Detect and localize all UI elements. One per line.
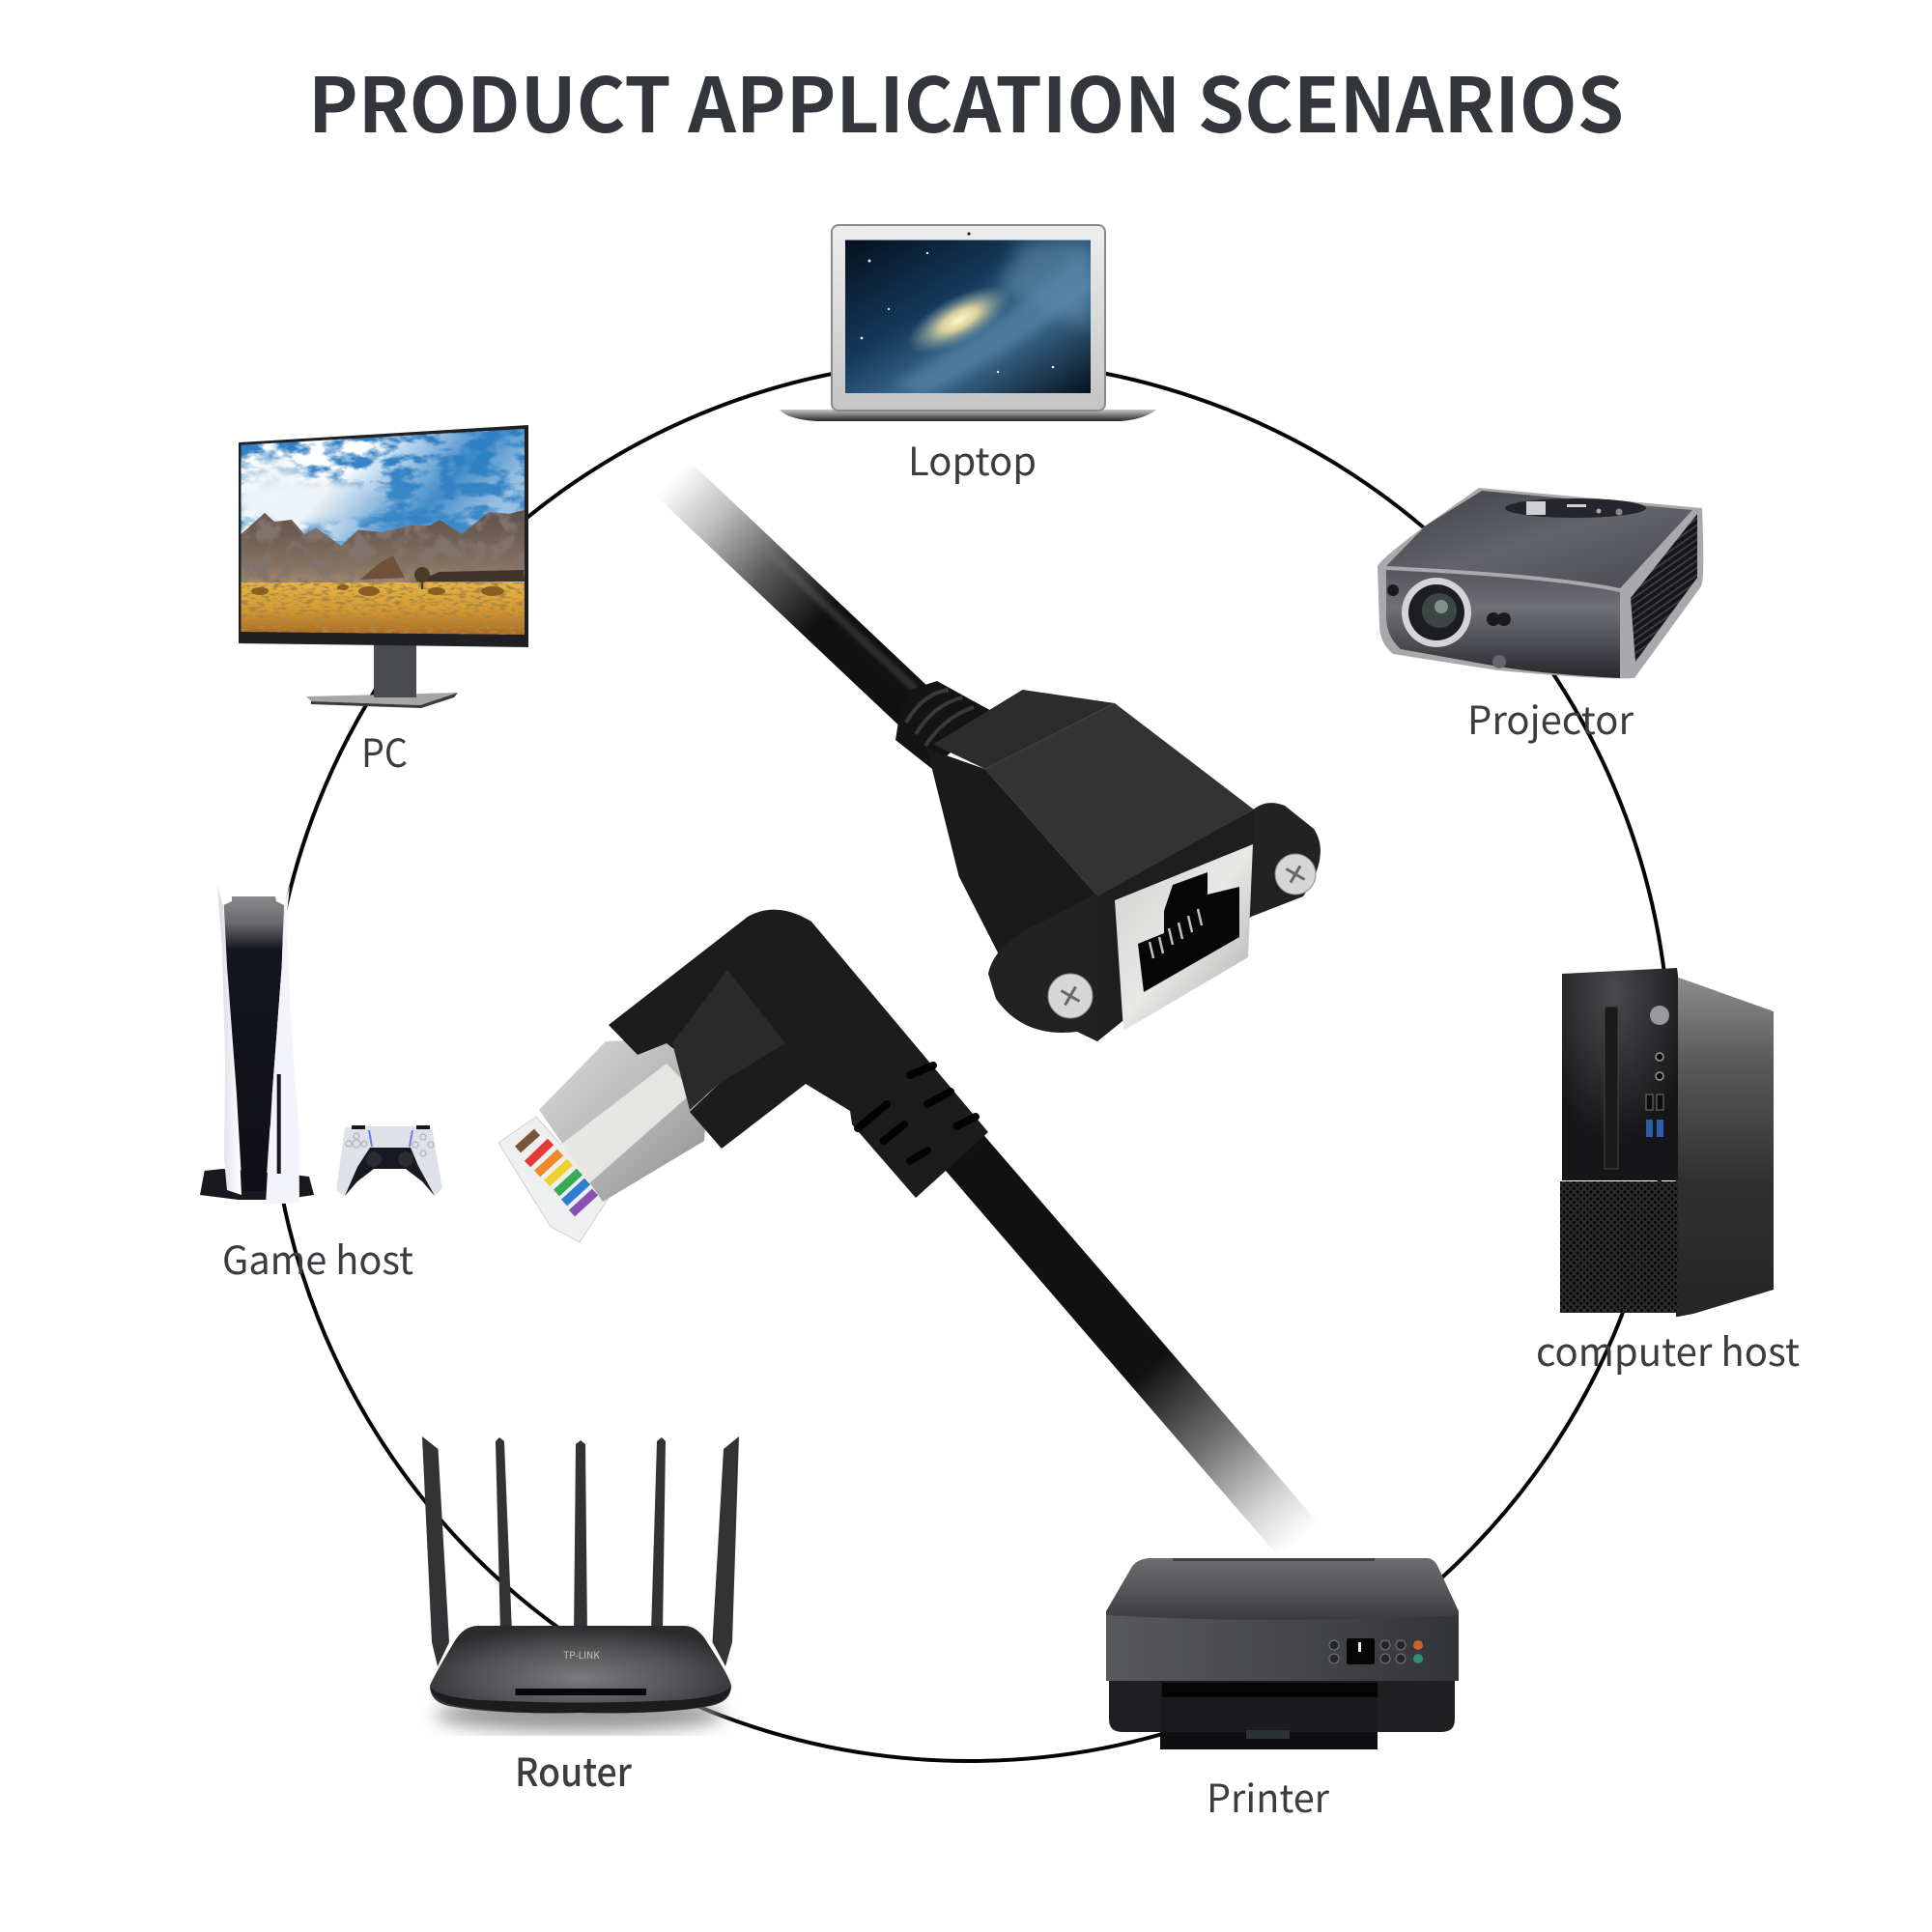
- controller: [336, 1125, 442, 1196]
- projector top: [1386, 491, 1692, 588]
- device: router: [422, 1436, 739, 1732]
- label: laptop: Loptop: [908, 431, 1037, 487]
- cable: lower section: [942, 1126, 1299, 1541]
- projector control strip: [1505, 498, 1646, 518]
- console disc slot: [277, 1074, 281, 1174]
- title: PRODUCT APPLICATION SCENARIOS: [308, 46, 1624, 155]
- projector lens: [1402, 578, 1471, 647]
- printer mid body: [1106, 1613, 1459, 1681]
- connection ring: [269, 360, 1669, 1761]
- label: game host: Game host: [222, 1230, 413, 1286]
- router shadow: [435, 1697, 724, 1732]
- console left wing: [217, 886, 242, 1195]
- label: PC: PC: [361, 723, 408, 779]
- projector grill: [1631, 514, 1697, 662]
- boot shading wedge: [672, 970, 785, 1110]
- monitor screen landscape: [234, 425, 528, 637]
- laptop camera dot: [967, 232, 971, 236]
- housing side: [927, 749, 1097, 1041]
- router slot: [516, 1689, 646, 1695]
- right-angle RJ45 plug: [498, 910, 988, 1242]
- console core: [224, 896, 284, 1191]
- colored wires: [518, 1132, 595, 1213]
- jack pins: [1150, 909, 1202, 958]
- router antennas: [422, 1436, 739, 1666]
- clear latch: [551, 1064, 694, 1183]
- router body: [430, 1626, 731, 1713]
- projector small details: [1387, 584, 1511, 668]
- housing bevel: [933, 690, 1115, 769]
- tower side: [1676, 977, 1774, 1317]
- laptop base: [780, 410, 1156, 421]
- printer lid: [1106, 1558, 1459, 1620]
- tower ports: [1646, 1006, 1669, 1137]
- label: computer host: computer host: [1536, 1321, 1800, 1378]
- metal face: [1115, 844, 1253, 1031]
- label: router: Router: [515, 1742, 633, 1798]
- boot grip slits: [858, 1065, 976, 1161]
- printer control panel: [1329, 1638, 1423, 1664]
- device: game console and controller: [200, 886, 442, 1205]
- tower mesh: [1560, 1181, 1678, 1313]
- device: laptop: [780, 225, 1156, 421]
- cable: upper section: [672, 478, 918, 710]
- console right wing: [266, 886, 299, 1205]
- screw right: [1275, 854, 1316, 895]
- printer lower body: [1109, 1676, 1455, 1732]
- flange and ears: [988, 803, 1321, 1041]
- router rim: [430, 1686, 731, 1713]
- device: projector: [1378, 488, 1703, 678]
- metal shield: [539, 1038, 707, 1202]
- laptop lid: [832, 225, 1105, 411]
- device: monitor PC: [234, 425, 528, 708]
- housing front frame: [1097, 810, 1254, 1041]
- screw left: [1048, 974, 1093, 1018]
- projector front: [1386, 570, 1620, 678]
- strain relief: [895, 681, 995, 769]
- female panel-mount connector: [895, 681, 1321, 1041]
- console stand: [200, 1169, 314, 1200]
- monitor bezel: [239, 425, 528, 647]
- printer lid lip: [1173, 1558, 1375, 1561]
- device: printer: [1106, 1558, 1459, 1749]
- label: projector: Projector: [1467, 690, 1634, 746]
- tower drive bay: [1605, 1007, 1618, 1169]
- device: computer tower: [1560, 968, 1774, 1317]
- label: printer: Printer: [1207, 1768, 1329, 1824]
- crystal tip: [498, 1117, 609, 1242]
- projector silver shell: [1378, 488, 1703, 678]
- jack opening: [1138, 872, 1239, 992]
- housing top: [985, 703, 1254, 896]
- boot: [609, 910, 988, 1198]
- tower front panel: [1562, 968, 1678, 1180]
- router brand: TP-LINK: [563, 1647, 600, 1662]
- laptop screen: [845, 240, 1091, 393]
- monitor stand: [306, 644, 458, 708]
- printer paper tray: [1160, 1681, 1378, 1749]
